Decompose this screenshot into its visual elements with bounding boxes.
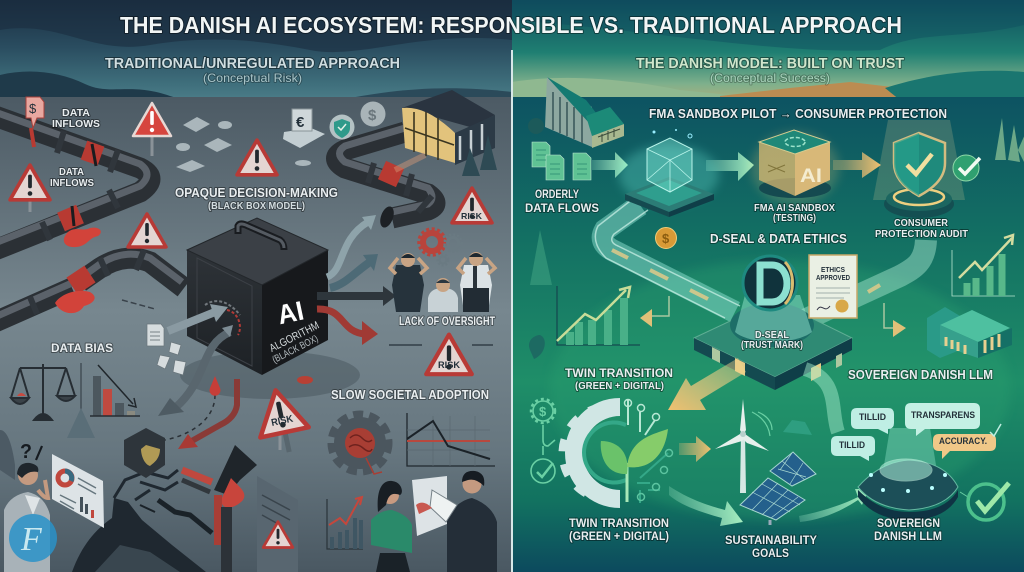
label: d-seal trust mark [741,330,803,351]
box text [268,295,321,366]
icon: shield coin [330,114,354,140]
broken red pipe [182,445,257,572]
label: data inflows: DATA [62,107,90,119]
label: twin transition upper: TWIN TRANSITION [565,366,673,380]
icon: AI sandbox cube [751,130,839,204]
icon: euro document stack: € [296,114,305,131]
icon: AI sandbox cube: AI [800,166,822,187]
blood puddle [64,228,101,247]
bar chart: data bias [67,363,140,438]
speech bubble: transparens [905,403,980,436]
label: data inflows [52,107,100,130]
icon: ethics certificate [809,255,857,318]
people: two colleagues reviewing [371,471,497,572]
label: sustainability goals [725,533,817,560]
label: orderly data flows: ORDERLY [535,187,579,201]
icon: euro document stack [283,109,325,148]
label: twin transition upper: (GREEN + DIGITAL) [575,380,664,392]
glass tube left [595,198,740,318]
heading: traditional approach [105,55,400,85]
label: d-seal trust mark: D-SEAL [755,330,789,341]
label: sovereign danish llm lower [874,516,942,543]
scattered data chips [176,117,311,172]
icon: gear with brain [331,414,389,474]
arrows: sustainability flow [669,436,869,526]
label: FMA AI sandbox: FMA AI SANDBOX [754,203,835,214]
heading: traditional approach: (Conceptual Risk) [203,71,302,85]
label: sovereign danish llm lower: SOVEREIGN [877,516,940,530]
person: puzzled analyst: ? [20,441,32,463]
speech bubble: tillid lower: TILLID [839,440,865,451]
icon: dollar document and inflow labels [26,97,100,130]
label: consumer protection audit [875,217,969,240]
heading: danish model [636,55,904,85]
icon: risk sign and dashed line [389,335,493,374]
label: opaque decision-making: (BLACK BOX MODEL) [208,201,305,212]
icon: tilted risk sign [251,385,313,457]
small rising chart [327,497,363,549]
icon: gear with leaf and circuit [563,398,672,508]
heading: traditional approach: TRADITIONAL/UNREGULATED APPROACH [105,55,400,72]
icon: green offices [927,307,1012,358]
icon: check ring [960,483,1009,520]
right pipe and warehouse [336,90,497,229]
icon: wind turbine [715,399,812,493]
icon: risk sign right upper [452,188,492,223]
icon: glass cube platform [619,129,719,217]
icon: risk sign and dashed line: RISK [438,360,460,370]
icon: warning sign 3 [237,140,277,175]
chart: upper right growth [952,235,1015,296]
line chart: adoption decline [407,413,495,466]
label: opaque decision-making [175,185,338,212]
label: twin transition lower [569,516,669,543]
icon: LLM hub [858,428,958,520]
arrow: gold to twin transition [668,358,746,410]
arrows: sandbox pipeline [592,152,881,181]
icon: dollar gear and check [531,399,555,483]
label: consumer protection audit: CONSUMER [894,217,948,229]
arrow: glass path to llm [805,369,838,432]
icon: dollar coin: $ [368,107,377,124]
black box [180,218,360,399]
icon: red warning sign [133,103,171,136]
label: opaque decision-making: OPAQUE DECISION-MAKING [175,185,338,200]
label: sovereign danish llm lower: DANISH LLM [874,529,942,543]
arrows around black box [122,215,396,449]
icon: warning sign 1 [10,165,50,200]
label: d-seal trust mark: (TRUST MARK) [741,340,803,351]
label: orderly data flows: DATA FLOWS [525,201,599,215]
icon: stressed team [390,229,495,312]
label: slow societal adoption: SLOW SOCIETAL ADOPTION [331,387,489,402]
label: data inflows: INFLOWS [52,118,100,130]
speech bubble: tillid lower [831,436,875,461]
icon: solar panels [740,452,816,525]
label: orderly data flows [525,187,599,215]
label: d-seal & data ethics: D-SEAL & DATA ETHICS [710,231,847,246]
title: THE DANISH AI ECOSYSTEM: RESPONSIBLE VS. TRADITIONAL APPROACH [120,12,902,38]
broken ground and cracks [0,430,212,572]
label: lack of oversight: LACK OF OVERSIGHT [399,316,495,328]
speech bubble: accuracy [933,424,1001,459]
person: puzzled analyst [4,441,50,572]
speech bubble: tillid: TILLID [859,412,886,423]
icon: d-seal logo [743,256,797,310]
watermark logo [9,514,57,562]
label: data inflows second: INFLOWS [50,177,94,189]
box text: AI [275,295,306,330]
divider [511,50,513,572]
trees [530,118,1024,285]
label: FMA sandbox pilot: FMA SANDBOX PILOT → CONSUMER PROTECTION [649,106,947,121]
speech bubble: accuracy: ACCURACY. [939,436,987,446]
label: FMA AI sandbox [754,203,835,224]
label: sovereign llm upper: SOVEREIGN DANISH LLM [848,368,993,382]
tree left [529,335,545,359]
panel: traditional approach background [0,0,512,572]
label: data inflows second: DATA [59,166,84,178]
small gold arrows [640,296,906,337]
label: consumer protection audit: PROTECTION AUDIT [875,228,969,240]
icon: d-seal platform [694,295,852,390]
paper documents [147,324,186,375]
icon: green building [528,77,624,148]
warning signs [30,103,280,450]
icon: analytics board [52,454,104,528]
watermark logo: F [20,521,43,558]
heading: danish model: (Conceptual Success) [710,71,830,85]
icon: risk sign right upper: RISK [461,211,483,221]
icon: gold coin [656,228,676,248]
speech bubble: tillid [851,408,894,434]
broken pipeline top left [0,112,150,250]
icon: dollar document and inflow labels: $ [29,101,37,116]
label: sustainability goals: SUSTAINABILITY [725,533,817,547]
icon: gold coin: $ [662,231,670,246]
heading: danish model: THE DANISH MODEL: BUILT ON TRUST [636,55,904,72]
icon: shield cube on broken ground [124,428,165,478]
box text: ALGORITHM [268,320,321,355]
label: twin transition lower: TWIN TRANSITION [569,516,669,530]
icon: scales of bias [11,364,75,420]
icon: ethics certificate: ETHICS [821,265,845,274]
icon: report with warning [257,476,298,572]
speech bubble: transparens: TRANSPARENS [911,410,975,421]
glass tube right [800,240,926,322]
icon: ethics certificate: APPROVED [816,273,850,282]
chart: left growth [557,286,640,345]
icon: dollar coin [360,102,386,126]
icon: documents [532,142,591,180]
icon: dollar gear and check: $ [539,404,547,419]
label: twin transition lower: (GREEN + DIGITAL) [569,529,669,543]
icon: tilted risk sign: RISK [270,413,295,429]
icon: shield on gold base [873,120,965,218]
box text: (BLACK BOX) [271,333,320,366]
label: data inflows second [50,166,94,189]
label: FMA AI sandbox: (TESTING) [773,213,816,224]
label: sustainability goals: GOALS [752,546,789,560]
lower left pipe [0,250,184,322]
label: data bias: DATA BIAS [51,341,113,355]
label: twin transition upper [565,366,673,392]
icon: check badge [953,155,980,181]
panel: danish model background [512,0,1024,572]
icon: warning sign 2 [128,214,166,247]
